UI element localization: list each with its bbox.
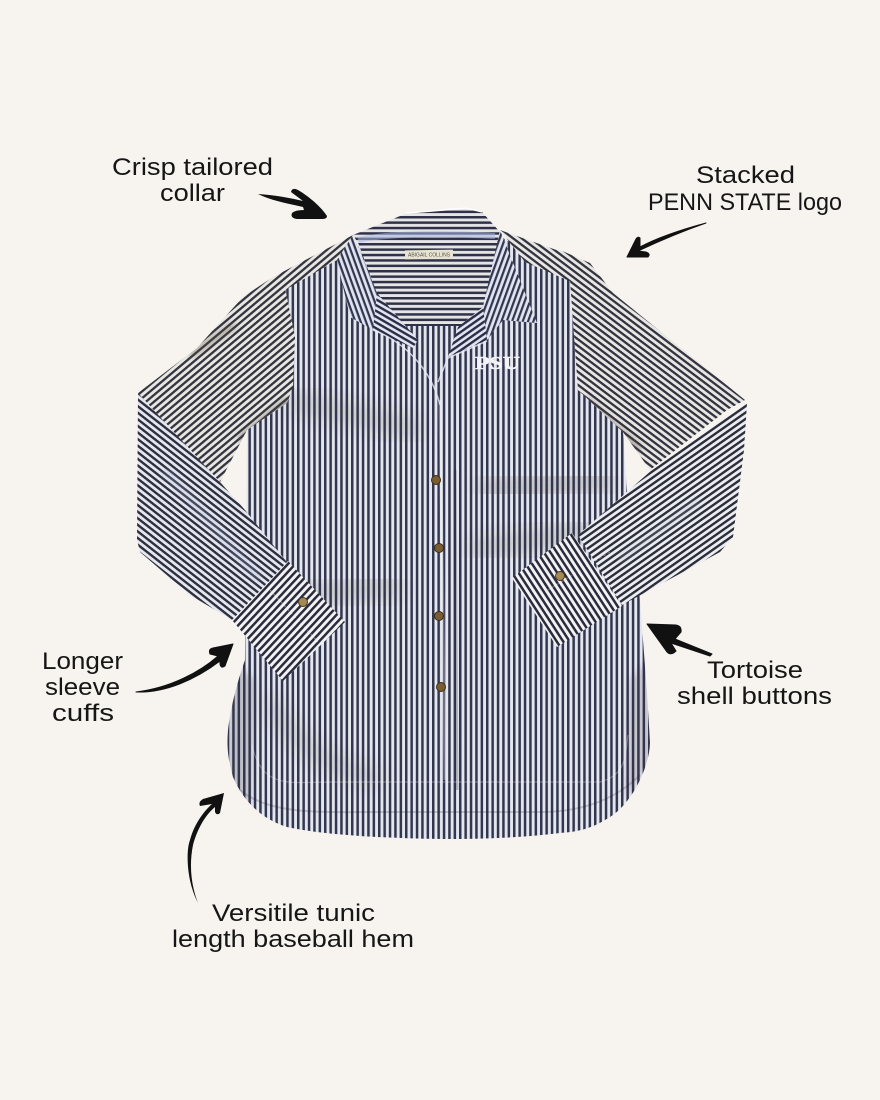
left cuff: [232, 561, 345, 681]
callout: sleeve cuffs: [42, 648, 123, 727]
shirt body: [228, 230, 652, 839]
left forearm sleeve: [137, 393, 290, 620]
arrow: hem: [188, 793, 224, 903]
arrow: collar: [258, 189, 327, 219]
buttons: [298, 476, 564, 692]
right forearm sleeve: [578, 403, 747, 605]
neck label: ABIGAIL COLLINS: [408, 252, 451, 258]
callout: Penn State logo: PENN STATE logo: [648, 189, 842, 216]
callout: tunic hem: length baseball hem: [172, 926, 414, 953]
collar flap left: [337, 235, 418, 348]
callout: tortoise shell buttons: [677, 657, 832, 710]
callout: tunic hem: Versitile tunic: [212, 900, 375, 927]
left placket edge: [373, 330, 440, 405]
left shoulder yoke: [273, 235, 353, 290]
arrow: logo: [627, 223, 706, 257]
collar flap right: [448, 230, 537, 357]
callout: tortoise shell buttons: Tortoise: [707, 657, 803, 684]
left upper sleeve: [138, 277, 295, 482]
neck opening: [373, 322, 470, 382]
shirt: [137, 208, 747, 839]
right placket edge: [438, 341, 487, 382]
callout: crisp tailored collar: collar: [160, 180, 225, 207]
callout: Penn State logo: Stacked: [696, 162, 795, 189]
right cuff: [512, 533, 622, 647]
right shoulder yoke: [500, 230, 572, 282]
callout: sleeve cuffs: sleeve: [45, 674, 120, 701]
callout: tortoise shell buttons: shell buttons: [677, 683, 832, 710]
callout: sleeve cuffs: cuffs: [52, 700, 114, 727]
callout: crisp tailored collar: Crisp tailored: [112, 154, 273, 181]
collar inner back: [357, 232, 500, 326]
collar back edge: [353, 208, 500, 243]
callout: crisp tailored collar: [112, 154, 273, 207]
callout: sleeve cuffs: Longer: [42, 648, 123, 675]
arrow: buttons: [647, 624, 712, 656]
callout: tunic hem: [172, 900, 414, 953]
arrow: cuffs: [136, 644, 233, 692]
callout: Penn State logo: [648, 162, 842, 216]
PSU logo: PSU: [475, 353, 520, 373]
right upper sleeve: [560, 250, 745, 470]
neck label: [405, 250, 453, 259]
